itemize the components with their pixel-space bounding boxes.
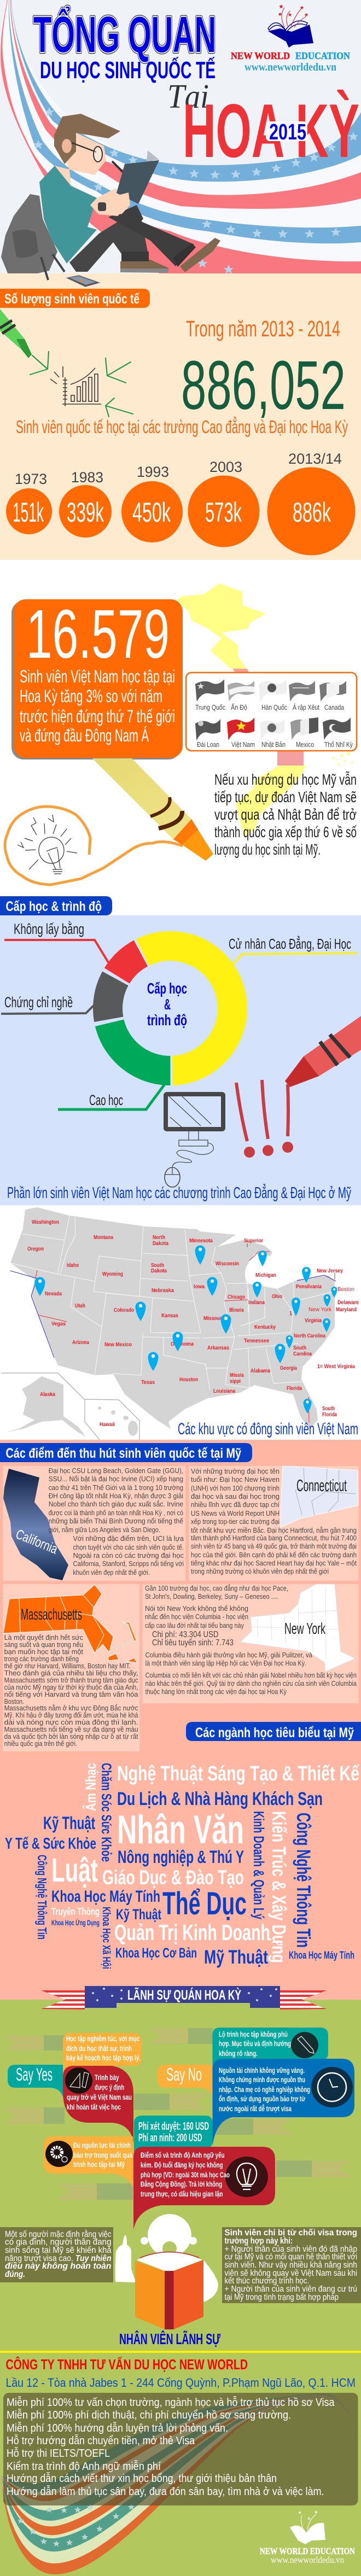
panel: Connecticut: trong những trường có khuôn viên đẹp nhất thế giới xyxy=(191,1567,329,1575)
bubble chart by year: 2003 xyxy=(209,459,242,475)
word cloud of majors: Nông nghiệp & Thú Y xyxy=(118,1847,244,1867)
services panel: Hỗ trợ hướng dẫn chuyển tiền, mở thẻ Visa xyxy=(7,2434,195,2447)
speech bubble: study route: Lộ trình học tập không phù xyxy=(219,2030,288,2038)
chart label: no degree: Không lấy bằng xyxy=(14,920,84,937)
panel: flags of top countries: Hàn Quốc xyxy=(261,703,287,711)
panel: Connecticut: Với những trường đại học tên xyxy=(191,1467,280,1475)
backpack strap and phone xyxy=(41,254,101,287)
speech bubble: grades and honesty: phù hợp (VD: ngoài 30t mà học Cao xyxy=(141,2170,230,2179)
section heading: so luong xyxy=(0,289,150,308)
word cloud of majors: Khoa Học Máy Tính xyxy=(51,1888,160,1906)
bubble chart by year: 1973 xyxy=(15,471,47,487)
map state labels: Oregon xyxy=(27,1246,44,1252)
panel: Massachusetts: Mỹ. Khí hậu ở đây tương đối ẩm ướt, mùa hè khá xyxy=(4,1711,138,1719)
icon: computer and mouse xyxy=(165,1094,223,1187)
panel: 16.579 Vietnamese students xyxy=(11,595,183,760)
US map xyxy=(1,1207,336,1440)
map state labels: Utah xyxy=(75,1302,85,1309)
speech bubble: return intent: Trình bày xyxy=(95,2073,119,2082)
map state labels: Carolina xyxy=(293,1351,312,1357)
panel: flags of top countries: Canada xyxy=(324,703,345,711)
word cloud of majors: Chăm Sóc Sức Khỏe xyxy=(98,1763,114,1862)
icon: New York map xyxy=(240,1584,356,1672)
map state labels: Maryland xyxy=(336,1306,357,1313)
word cloud of majors: Truyền Thông xyxy=(51,1906,100,1917)
section background: map xyxy=(0,1205,361,1440)
panel: flags of top countries xyxy=(186,673,357,751)
panel: 16.579 Vietnamese students: và đứng đầu Đông Nam Á xyxy=(20,726,149,745)
panel: California: được coi là thành phố an toàn nhất Hoa Kỳ , nơi có xyxy=(49,1509,183,1517)
map state labels: Superior xyxy=(244,1237,263,1244)
logo: footer white: www.newworldedu.vn xyxy=(271,2555,344,2565)
speech bubble: return intent xyxy=(63,2066,133,2143)
map state labels: South xyxy=(293,1345,306,1351)
speech bubble: income: Không chứng minh được nguồn thu xyxy=(219,2075,305,2084)
panel: New York: là một thành viên sáng lập Hiệp hội các Viện Đại học Hoa Kỳ. xyxy=(145,1659,306,1667)
note box: refusal conditions: trường hợp này khi: xyxy=(224,2236,293,2246)
icon: growth chart xyxy=(50,366,101,406)
map state labels: Louisiana xyxy=(213,1388,235,1394)
panel: Connecticut xyxy=(189,1466,359,1581)
note box: common belief: điều này không hoàn toàn xyxy=(5,2262,112,2271)
speech bubble: fees xyxy=(134,2116,212,2152)
panel: Massachusetts: trong các trường danh tiếng xyxy=(4,1655,79,1663)
map state labels: Indiana xyxy=(248,1299,265,1306)
ribbon heading: consulate xyxy=(41,1986,327,2010)
map state labels: Wyoming xyxy=(102,1271,123,1277)
speech bubble: study plan: Học tập nghiêm túc, với mục xyxy=(66,2034,139,2043)
speech bubble: return intent: quay trở về Việt Nam sau xyxy=(67,2093,132,2101)
panel: New York: Columbia điều hành giải thưởng văn học Mỹ, giải Pulitzer, và xyxy=(145,1651,313,1659)
panel: flags of top countries: Trung Quốc xyxy=(195,703,225,711)
section heading: destinations: Các điểm đến thu hút sinh viên quốc tế tại Mỹ xyxy=(5,1446,241,1461)
word cloud of majors: Kiến Trúc & Xây Dựng xyxy=(268,1811,289,1963)
panel: Connecticut: nhiều lĩnh vực đã được tạp chí xyxy=(191,1500,280,1509)
map state labels: Missis xyxy=(230,1372,244,1378)
panel: Connecticut: (UNH) với hơn 100 chương trình xyxy=(191,1484,280,1492)
panel: 16.579 Vietnamese students: trước hiện đứng thứ 7 thế giới xyxy=(20,706,175,726)
panel: flags of top countries: Ả rập Xêut xyxy=(293,703,319,711)
script word Tại: Tại xyxy=(167,78,209,115)
section background: salmon xyxy=(0,1440,361,2000)
map state labels: North xyxy=(153,1234,165,1241)
panel: California: những bãi biển Thái Bình Dương nổi tiếng thế xyxy=(49,1517,184,1525)
panel: California: khuôn viên đẹp nhất thế giới. xyxy=(73,1568,150,1576)
panel: Massachusetts: sáng suốt và quan trọng nếu xyxy=(4,1640,83,1649)
panel: California: cao thứ 41 trên Thế Giới và là 1 trong 10 trường xyxy=(49,1483,183,1492)
word cloud of majors: Nhân Văn xyxy=(117,1808,244,1852)
note box: common belief: Một số người mặc định rằng việc xyxy=(5,2230,112,2239)
panel: Massachusetts: thế giớ như Harvard, Williams, Boston hay MIT. xyxy=(4,1662,131,1670)
student character reading xyxy=(1,114,220,274)
panel: 16.579 Vietnamese students: 16.579 xyxy=(26,595,170,673)
donut chart: levels of study: & xyxy=(164,996,171,1013)
icon: New York map: New York xyxy=(284,1620,325,1638)
speech bubble: study route: hợp. Mục tiêu và định hướng xyxy=(219,2039,291,2048)
panel: flags of top countries: Đài Loan xyxy=(197,740,219,749)
bubble chart by year: 1983 xyxy=(71,469,103,486)
panel: California: Ngoài ra còn có các trường đại học xyxy=(73,1551,184,1559)
speech bubble: finances xyxy=(44,2136,133,2187)
map state labels: Tennessee xyxy=(244,1337,269,1344)
map state labels: Oklahoma xyxy=(171,1341,194,1347)
panel: Massachusetts: bạn muốn học tập tại một xyxy=(4,1648,83,1656)
speech bubble: grades and honesty: trung thực, có dấu hiệu gian lận xyxy=(141,2189,223,2198)
speech bubble: study route xyxy=(212,2028,328,2072)
speech bubble: grades and honesty: kém. Độ tuổi đăng ký học không xyxy=(141,2160,223,2169)
icon: California map: California xyxy=(14,1527,60,1557)
yellow divider bar xyxy=(0,2351,361,2353)
speech bubble: grades and honesty: Điểm số và trình độ Anh ngữ yếu xyxy=(141,2151,224,2159)
panel: California: California, Stanford, Scripps nổi tiếng với xyxy=(73,1559,184,1568)
map state labels: Illinois xyxy=(229,1307,244,1313)
panel: New York: Chỉ tiêu tuyển sinh: 7.743 xyxy=(152,1638,234,1648)
note box: refusal conditions xyxy=(222,2227,361,2303)
footer flag wave xyxy=(1,2354,361,2574)
speech bubble: study plan: đích du học thật sự, trình xyxy=(66,2044,132,2053)
map state labels: Alaska xyxy=(40,1391,55,1398)
callout: Say No: Say No xyxy=(166,2064,202,2084)
map state labels: South xyxy=(322,1405,335,1412)
map state labels: Vegas xyxy=(51,1321,66,1327)
panel: Connecticut: US News và World Report UNH xyxy=(191,1509,280,1517)
title: Tổng Quan xyxy=(33,6,216,63)
map state labels: Boston xyxy=(337,1286,354,1293)
services panel: Hướng dẫn làm thủ tục sân bay, đưa đón sân bay, tìm nhà ở và việc làm. xyxy=(7,2485,324,2498)
map state labels: Kentucky xyxy=(254,1324,276,1330)
note box: common belief: đúng. xyxy=(5,2270,25,2279)
word cloud of majors: Công Nghệ Thông Tin xyxy=(293,1813,314,1948)
map state labels: New York xyxy=(308,1306,332,1313)
logo: new world education: www.newworldedu.vn xyxy=(244,61,336,73)
panel: Massachusetts: Là một quyết định hết sức xyxy=(4,1633,83,1642)
map state labels: Nebraska xyxy=(152,1287,174,1294)
map state labels: Iowa xyxy=(194,1283,205,1290)
donut chart: levels of study xyxy=(84,922,256,1094)
panel: Massachusetts: nổi tiếng với Harvard và trung tâm văn hóa xyxy=(4,1690,138,1698)
logo: new world education: EDUCATION xyxy=(295,50,350,61)
word cloud of majors: Luật xyxy=(51,1851,98,1889)
panel: New York: nhắc đến học viện Columbia - học viện xyxy=(145,1613,248,1621)
callout: Say Yes xyxy=(8,2064,63,2097)
word cloud of majors: Mỹ Thuật xyxy=(204,1947,268,1968)
speech bubble: study route: không rõ ràng. xyxy=(219,2049,258,2058)
panel: Massachusetts: da và quốc tịch bởi làn sóng nhập cư ồ ạt từ rất xyxy=(4,1732,138,1740)
bubble chart by year: 151k xyxy=(13,497,44,528)
map state labels: Idaho xyxy=(67,1262,79,1269)
services panel: Hướng dẫn cách viết thư xin học bổng, thư giới thiệu bản thân xyxy=(7,2472,277,2485)
subtitle: DU HỌC SINH QUỐC TẾ xyxy=(40,56,216,84)
panel: Massachusetts: Massachusetts nổi tiếng về sự đa dạng về màu xyxy=(4,1725,138,1733)
services panel: Hỗ trợ thi IELTS/TOEFL xyxy=(7,2447,110,2460)
bubble chart by year: 886k xyxy=(293,497,331,528)
services panel: Miễn phí 100% phí dịch thuật, chi phí chuyển hồ sơ sang trường. xyxy=(7,2409,291,2421)
note box: refusal conditions: tại Mỹ trong tình trạng bất hợp pháp xyxy=(224,2293,339,2302)
map state labels: New Mexico xyxy=(104,1341,132,1348)
logo: footer white xyxy=(260,2510,356,2565)
map state labels: Ohio xyxy=(272,1293,282,1300)
panel: Massachusetts: của nước Mỹ ngay từ thời kỳ thuộc địa của Anh, xyxy=(4,1683,138,1691)
bubble chart by year: 450k xyxy=(132,497,171,528)
bubble chart by year: 1993 xyxy=(137,464,169,480)
speech bubble: return intent: khi hoàn tất việc học xyxy=(67,2102,121,2111)
word cloud of majors: Thể Dục xyxy=(162,1886,247,1921)
speech bubble: study plan: bày kế hoạch học tập hợp lý. xyxy=(66,2053,141,2062)
panel: Connecticut: tuổi như: Đại học New Haven xyxy=(191,1475,280,1483)
bubble chart by year: 339k xyxy=(67,497,104,528)
icon: red crayon with scribbles xyxy=(236,1016,361,1158)
speech bubble: return intent: được ý định xyxy=(95,2083,124,2092)
panel: California xyxy=(3,1466,185,1581)
word cloud of majors: Âm Nhạc xyxy=(82,1763,99,1811)
word cloud of majors: Y Tế & Sức Khỏe xyxy=(5,1835,96,1853)
panel: Massachusetts: Massachusetts sớm trở thành trung tâm giáo dục xyxy=(4,1676,138,1684)
map state labels: Pensilvania xyxy=(296,1283,322,1290)
panel: New York: cấp cao lâu đời nhất tại tiểu bang này xyxy=(145,1621,244,1629)
panel: Massachusetts xyxy=(3,1584,139,1751)
word cloud of majors: Khoa Học Ứng Dụng xyxy=(51,1918,100,1927)
icon: Massachusetts map xyxy=(3,1585,137,1663)
title: Tổng Quan: TỔNG QUAN xyxy=(33,6,216,63)
map state labels: Chicago xyxy=(228,1294,245,1300)
map state labels: Alabama xyxy=(251,1368,270,1374)
ribbon heading: consulate: LÃNH SỰ QUÁN HOA KỲ xyxy=(127,1987,241,2003)
icon: California map xyxy=(3,1469,68,1580)
logo: new world education xyxy=(231,4,350,73)
panel: California: ĐH công lập tốt nhất Hoa Kỳ, nhận được 3 giải xyxy=(49,1492,183,1500)
map state labels: Hawaii xyxy=(100,1421,115,1428)
word cloud of majors: Giáo Dục & Đào Tạo xyxy=(102,1866,244,1889)
speech bubble: income: ổn định, sử dụng nguồn bảo trợ từ xyxy=(219,2094,306,2103)
note box: refusal conditions: Sinh viên chỉ bị từ chối visa trong xyxy=(224,2228,357,2238)
panel: California: Nobel cho thành tích giáo dục xuất sắc. Irvine xyxy=(49,1500,183,1508)
section background: white xyxy=(0,560,361,915)
map state labels: Colorado xyxy=(114,1307,134,1313)
map state labels: North Carolina xyxy=(294,1333,325,1339)
section background: beige xyxy=(0,273,361,560)
icon: Connecticut map xyxy=(281,1466,358,1527)
map state labels: South xyxy=(151,1262,164,1269)
section heading: cap hoc: Cấp học & trình độ xyxy=(5,899,102,914)
chart label: vocational: Chứng chỉ nghề xyxy=(4,994,73,1010)
donut chart: levels of study: trình độ xyxy=(147,1012,187,1029)
bubble chart by year: 573k xyxy=(205,497,242,528)
word cloud of majors: Công Nghệ Thông Tin xyxy=(35,1855,49,1940)
map state labels: Missouri xyxy=(203,1315,223,1322)
year badge 2015: 2015 xyxy=(269,119,306,144)
map state labels: Kansas xyxy=(161,1312,178,1319)
chart label: graduate xyxy=(58,1084,165,1109)
header background xyxy=(0,0,361,273)
panel: California: Đại học CSU Long Beach, Golden Gate (GGU), xyxy=(49,1467,183,1475)
section heading: so luong: Số lượng sinh viên quốc tế xyxy=(4,291,139,307)
speech bubble: grades and honesty xyxy=(133,2147,275,2229)
note box: common belief: có gia đình, người thân đang xyxy=(5,2238,112,2247)
map state labels: Montana xyxy=(94,1234,113,1241)
speech bubble: finances: trình học tập tại Mỹ xyxy=(73,2160,125,2169)
panel: Connecticut: đại học và sau đại học trong xyxy=(191,1492,280,1500)
figure: consular officer with book xyxy=(115,2214,218,2329)
section heading: cap hoc xyxy=(0,896,112,915)
panel: flags of top countries: Mexico xyxy=(296,740,314,749)
map state labels: Dakota xyxy=(153,1240,168,1247)
faded background flags xyxy=(3,2028,352,2200)
bubble chart by year: 2013/14 xyxy=(288,451,342,467)
speech bubble: fees: Phí xét duyệt: 160 USD xyxy=(138,2121,209,2133)
panel: Connecticut: xếp trong top-tier các trường đại xyxy=(191,1517,280,1526)
american flag ribbon xyxy=(1,0,361,273)
panel: New York: St John's, Dowling, Berkeley, Suny – Geneseo .... xyxy=(145,1592,278,1600)
callout: Say No xyxy=(158,2064,212,2097)
speech bubble: income: Nguồn tài chính không vững vàng. xyxy=(219,2066,305,2075)
speech bubble: income xyxy=(212,2059,354,2146)
panel: California: giới, nằm giữa Los Angeles và San Diego. xyxy=(49,1526,160,1534)
map state labels: sippi xyxy=(230,1378,241,1385)
panel: California: chọn tuyệt vời cho các sinh viên quốc tế. xyxy=(73,1543,184,1551)
speech bubble: fees: Phí an ninh: 200 USD xyxy=(138,2132,202,2144)
logo: new world education: NEW WORLD xyxy=(231,50,290,61)
speech bubble: finances: bảo trợ trong suốt quá xyxy=(73,2151,132,2159)
word cloud of majors: Kỹ Thuật xyxy=(116,1906,161,1923)
speech bubble: income: nước ngoài rất dễ trượt visa xyxy=(219,2104,292,2113)
speech bubble: finances: Đủ nguồn lực tài chính xyxy=(73,2141,131,2149)
panel: New York: Gần 100 trường đại học, cao đẳng như đại học Pace, xyxy=(145,1584,288,1592)
panel: California: Với những đặc điểm trên, UCI là lựa xyxy=(73,1534,184,1543)
map of Vietnam xyxy=(177,583,353,837)
speech bubble: study plan xyxy=(63,2033,141,2078)
panel: New York: Chi phí: 43.304 USD xyxy=(152,1630,219,1639)
panel: Massachusetts: dài và nóng nực còn mùa đông thì lạnh. xyxy=(4,1718,138,1726)
title: Tổng Quan: TỔNG QUAN xyxy=(33,6,216,63)
paragraph: forecast xyxy=(214,771,357,858)
map state labels: Arizona xyxy=(72,1339,89,1346)
map state labels: Arkansas xyxy=(207,1345,229,1351)
word cloud of majors: Khoa Học Cơ Bản xyxy=(115,1946,197,1961)
speech bubble: grades and honesty: Đẳng Cộng Đồng). Trả lời không xyxy=(141,2179,222,2188)
word cloud of majors: Khoa Học Xã Hội xyxy=(100,1907,112,1969)
callout: Say Yes: Say Yes xyxy=(16,2064,53,2084)
section background: light blue xyxy=(0,915,361,1205)
map state labels: Houston xyxy=(179,1376,198,1383)
panel: flags of top countries: Việt Nam xyxy=(231,740,255,749)
map state labels: New Jersey xyxy=(317,1267,343,1274)
icon: yellow crayon xyxy=(92,758,213,861)
map state labels: Florida xyxy=(322,1411,337,1418)
panel: 16.579 Vietnamese students: Sinh viên Việt Nam học tập tại xyxy=(20,667,175,686)
panel: flags of top countries: Nhật Bản xyxy=(261,740,286,749)
map state labels: 1= West Virginia xyxy=(317,1363,355,1370)
map state labels: Dakota xyxy=(151,1267,167,1274)
panel: New York: Nói tới New York không thể không xyxy=(145,1604,248,1613)
section heading: destinations xyxy=(0,1443,252,1462)
map state labels: Michigan xyxy=(255,1272,276,1278)
note box: common belief: năng trượt visa cao. Tuy nhiên xyxy=(5,2254,112,2263)
section background: green xyxy=(0,2000,361,2576)
map state labels: Minnesota xyxy=(189,1237,213,1244)
panel: Massachusetts: Boston. xyxy=(4,1697,24,1705)
panel: flags of top countries: Thổ Nhĩ Kỳ xyxy=(324,740,353,749)
icon: green crayon xyxy=(0,309,32,358)
hand drawn green arrows xyxy=(30,352,133,417)
panel: flags of top countries: Ấn Độ xyxy=(231,703,247,711)
company name: CÔNG TY TNHH TƯ VẤN DU HỌC NEW WORLD xyxy=(5,2356,248,2373)
bubble chart by year xyxy=(6,451,356,556)
map state labels: Florida xyxy=(287,1385,302,1392)
services panel xyxy=(3,2393,358,2505)
icon: Massachusetts map: Massachusetts xyxy=(21,1606,82,1623)
chart label: graduate: Cao học xyxy=(89,1092,123,1108)
services panel: Kiểm tra trình độ Anh ngữ miễn phí xyxy=(7,2460,161,2473)
word cloud of majors xyxy=(5,1762,360,1969)
services panel: Miễn phí 100% tư vấn chọn trường, ngành học và hỗ trợ thủ tục hồ sơ Visa xyxy=(7,2396,335,2409)
chart label: bachelor xyxy=(229,935,358,965)
panel: New York: thuộc hàng lớn nhất trong các viện đại học tại Hoa Kỳ xyxy=(145,1687,287,1696)
word cloud of majors: Kỹ Thuật xyxy=(43,1813,95,1833)
panel: California: SSU... Nổi bật là đại học Irvine (UCI) xếp hạng xyxy=(49,1475,183,1483)
icon: orange scribble with light bulb xyxy=(5,807,183,885)
chart label: no degree xyxy=(4,920,108,962)
map state labels xyxy=(27,1219,359,1428)
map location pins xyxy=(35,1246,337,1413)
map state labels: Georgia xyxy=(280,1365,297,1371)
speech bubble: income: nhập. Cha mẹ có nghề nghiệp không xyxy=(219,2085,310,2094)
caption: consular officer: NHÂN VIÊN LÃNH SỰ xyxy=(119,2330,220,2347)
panel: 16.579 Vietnamese students: Hoa Kỳ tăng 3% so với năm xyxy=(20,686,162,706)
map state labels: Virginia xyxy=(305,1317,322,1324)
panel: Massachusetts: nhiều quốc gia trên thế giới. xyxy=(4,1739,77,1748)
map state labels: Wisconsin xyxy=(216,1260,239,1267)
panel: Massachusetts: Massachusetts nằm ở khu vực Đông Bắc nước xyxy=(4,1704,138,1712)
word cloud of majors: Quản Trị Kinh Doanh xyxy=(114,1920,270,1945)
services panel: Miễn phí 100% hướng dẫn luyện trả lời phỏng vấn. xyxy=(7,2422,228,2434)
map state labels: 1 xyxy=(289,1310,292,1317)
note box: common belief: sinh sống tại Mỹ sẽ khiến khả xyxy=(5,2246,112,2255)
map state labels: Nevada xyxy=(45,1290,62,1297)
note box: refusal conditions: kết thúc chương trình học. xyxy=(224,2276,309,2286)
note box: common belief xyxy=(0,2227,113,2282)
panel: New York xyxy=(142,1584,359,1703)
donut chart: levels of study: Cấp học xyxy=(147,980,187,997)
map state labels: Washington xyxy=(32,1219,59,1225)
map state labels: Texas xyxy=(141,1379,155,1386)
panel: Massachusetts: Theo đánh giá của nhiều tài liệu cho thấy, xyxy=(4,1669,138,1677)
word cloud of majors: Kinh Doanh & Quản Lý xyxy=(251,1811,267,1919)
